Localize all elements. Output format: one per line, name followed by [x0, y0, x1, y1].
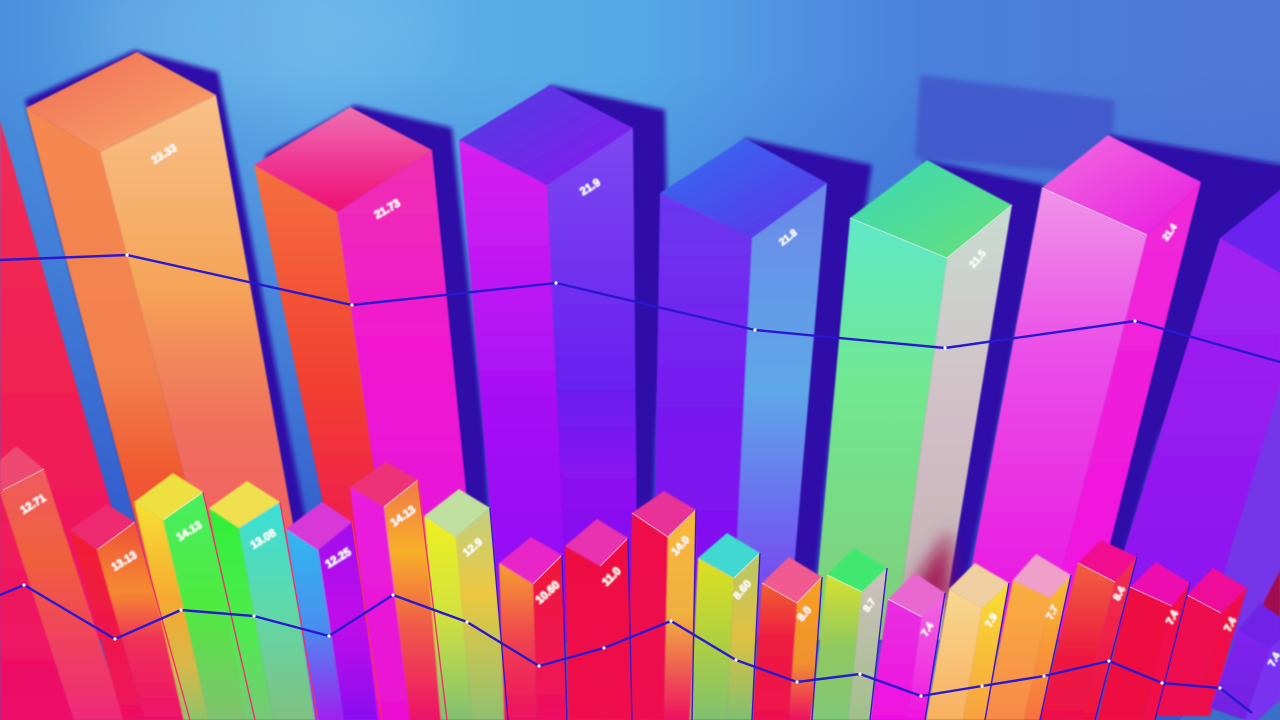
- front bar 8: 10.60: [534, 579, 562, 606]
- front bar 11: 8.60: [731, 578, 754, 602]
- front bar 14: 7.4: [920, 620, 936, 638]
- front bar 7: 12.9: [461, 536, 485, 559]
- bar 4 blue: 21.8: [777, 227, 800, 248]
- front bar 12: [752, 557, 822, 720]
- front bar 20: [1210, 603, 1280, 720]
- front bar 18: [1097, 562, 1190, 720]
- front bar 17: [1039, 540, 1137, 720]
- front bar 3: 14.13: [175, 519, 204, 544]
- front line series: [0, 583, 1252, 713]
- front bar 13: 8.7: [861, 596, 879, 614]
- front row of bars: [0, 446, 1280, 720]
- bar 3 purple: [459, 85, 638, 640]
- front bar 8: [499, 537, 567, 720]
- bar 5 green: [812, 160, 1012, 640]
- front bar 5: 12.25: [324, 546, 353, 571]
- bar 2 red magenta: 21.73: [373, 197, 402, 221]
- front bar 6: [350, 462, 447, 720]
- front bar 14: [870, 573, 945, 720]
- front bar 16: 7.7: [1045, 604, 1061, 622]
- front bar 6: 14.13: [389, 504, 418, 529]
- front bar 15: [926, 563, 1009, 720]
- front bar 5: [286, 502, 382, 720]
- front bar 18: 7.4: [1165, 609, 1181, 627]
- bar 5 green: 21.5: [968, 248, 989, 270]
- front bar 1: 12.71: [19, 492, 48, 517]
- front bar 1: [0, 446, 125, 720]
- bar 6 magenta: [958, 135, 1201, 640]
- bar 4 blue: [654, 138, 827, 640]
- front bar 4: [209, 481, 318, 720]
- front bar 9: [565, 519, 632, 720]
- bar 3 purple: 21.9: [578, 177, 603, 198]
- front bar 17: 8.4: [1112, 585, 1128, 603]
- front bar 4: 13.08: [249, 527, 278, 552]
- front bar 19: [1156, 568, 1247, 716]
- front bar 2: [70, 504, 190, 720]
- front bar 12: 8.0: [795, 604, 814, 624]
- front bar 7: [424, 489, 508, 720]
- back line series: [0, 253, 1280, 362]
- front bar 13: [811, 548, 887, 720]
- front bar 19: 7.4: [1223, 616, 1239, 634]
- bar 0: [0, 120, 150, 640]
- front bar 11: [690, 533, 760, 720]
- front bar 10: [628, 491, 696, 720]
- front bar 15: 7.9: [984, 612, 1000, 630]
- front bar 3: [134, 473, 255, 720]
- front bar 9: 11.0: [600, 565, 623, 588]
- bar 6 magenta: 21.4: [1160, 222, 1179, 242]
- bar 2 red magenta: [254, 107, 481, 640]
- bar 7 violet: [1097, 186, 1280, 640]
- front bar 16: [984, 554, 1071, 720]
- front bar 2: 13.13: [110, 549, 139, 574]
- distant dark red bar: [1262, 570, 1280, 640]
- bar 1 orange: 23.33: [150, 142, 179, 167]
- bar 1 orange: [26, 52, 314, 640]
- front bar 10: 14.0: [669, 534, 692, 558]
